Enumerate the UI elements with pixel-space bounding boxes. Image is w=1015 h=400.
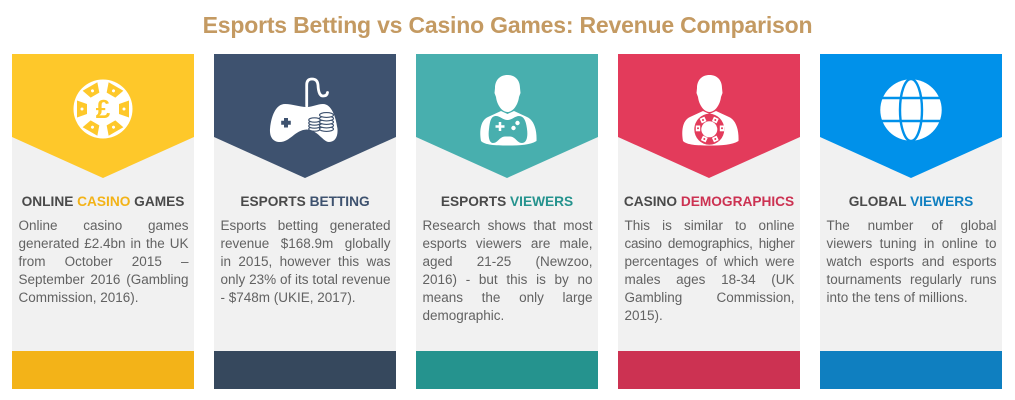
- body text: [826, 218, 996, 305]
- body text: This is similar to online: [624, 218, 794, 233]
- icon: casino chip with pound sign: [74, 80, 132, 138]
- heading: ESPORTS VIEWERS: [441, 194, 573, 209]
- body text: Commission, 2016).: [18, 290, 139, 305]
- body text: [422, 218, 592, 323]
- body text: into the tens of millions.: [826, 290, 968, 305]
- footer bar: [618, 351, 800, 389]
- banner: red: [618, 54, 800, 178]
- body text: [18, 218, 188, 305]
- panel: global viewers: [820, 54, 1002, 389]
- icon: person with casino chip: [682, 75, 739, 146]
- body text: generated £2.4bn in the UK: [18, 236, 188, 251]
- heading: CASINO DEMOGRAPHICS: [624, 194, 794, 209]
- body text: Gambling Commission,: [624, 290, 794, 305]
- body text: 2015).: [624, 308, 663, 323]
- body text: [220, 218, 390, 305]
- icon: game controller with coins: [270, 78, 338, 142]
- panel: casino demographics: [618, 54, 800, 389]
- banner: navy: [214, 54, 396, 178]
- footer bar: [214, 351, 396, 389]
- body text: from October 2015 –: [18, 254, 188, 269]
- body text: tournaments regularly runs: [826, 272, 996, 287]
- heading: ESPORTS BETTING: [240, 194, 370, 209]
- body text: Research shows that most: [422, 218, 592, 233]
- title: Esports Betting vs Casino Games: Revenue Comparison: [203, 12, 812, 38]
- panel: online casino games: [12, 54, 194, 389]
- body text: esports viewers are male,: [422, 236, 592, 251]
- footer bar: [820, 351, 1002, 389]
- body text: Esports betting generated: [220, 218, 390, 233]
- body text: - $748m (UKIE, 2017).: [220, 290, 356, 305]
- footer bar: [416, 351, 598, 389]
- icon: globe: [880, 80, 942, 140]
- body text: casino demographics, higher: [624, 236, 794, 251]
- body text: viewers tuning in online to: [826, 236, 996, 251]
- heading: GLOBAL VIEWERS: [849, 194, 973, 209]
- body text: watch esports and esports: [826, 254, 996, 269]
- body text: only 23% of its total revenue: [220, 272, 390, 287]
- body text: percentages of which were: [624, 254, 794, 269]
- banner: teal: [416, 54, 598, 178]
- body text: September 2016 (Gambling: [18, 272, 188, 287]
- banner: yellow: [12, 54, 194, 178]
- heading: ONLINE CASINO GAMES: [22, 194, 184, 209]
- body text: [624, 218, 794, 323]
- icon: casino chip with pound sign: £: [96, 94, 111, 124]
- banner: blue: [820, 54, 1002, 178]
- panel: esports betting: [214, 54, 396, 389]
- body text: demographic.: [422, 308, 504, 323]
- body text: 2016) - but this is by no: [422, 272, 592, 287]
- body text: aged 21-25 (Newzoo,: [422, 254, 592, 269]
- body text: in 2015, however this was: [220, 254, 390, 269]
- body text: means the only large: [422, 290, 592, 305]
- body text: revenue $168.9m globally: [220, 236, 390, 251]
- icon: person with game controller: [480, 75, 537, 146]
- body text: Online casino games: [18, 218, 188, 233]
- body text: males ages 18-34 (UK: [624, 272, 794, 287]
- body text: The number of global: [826, 218, 996, 233]
- footer bar: [12, 351, 194, 389]
- panel: esports viewers: [416, 54, 598, 389]
